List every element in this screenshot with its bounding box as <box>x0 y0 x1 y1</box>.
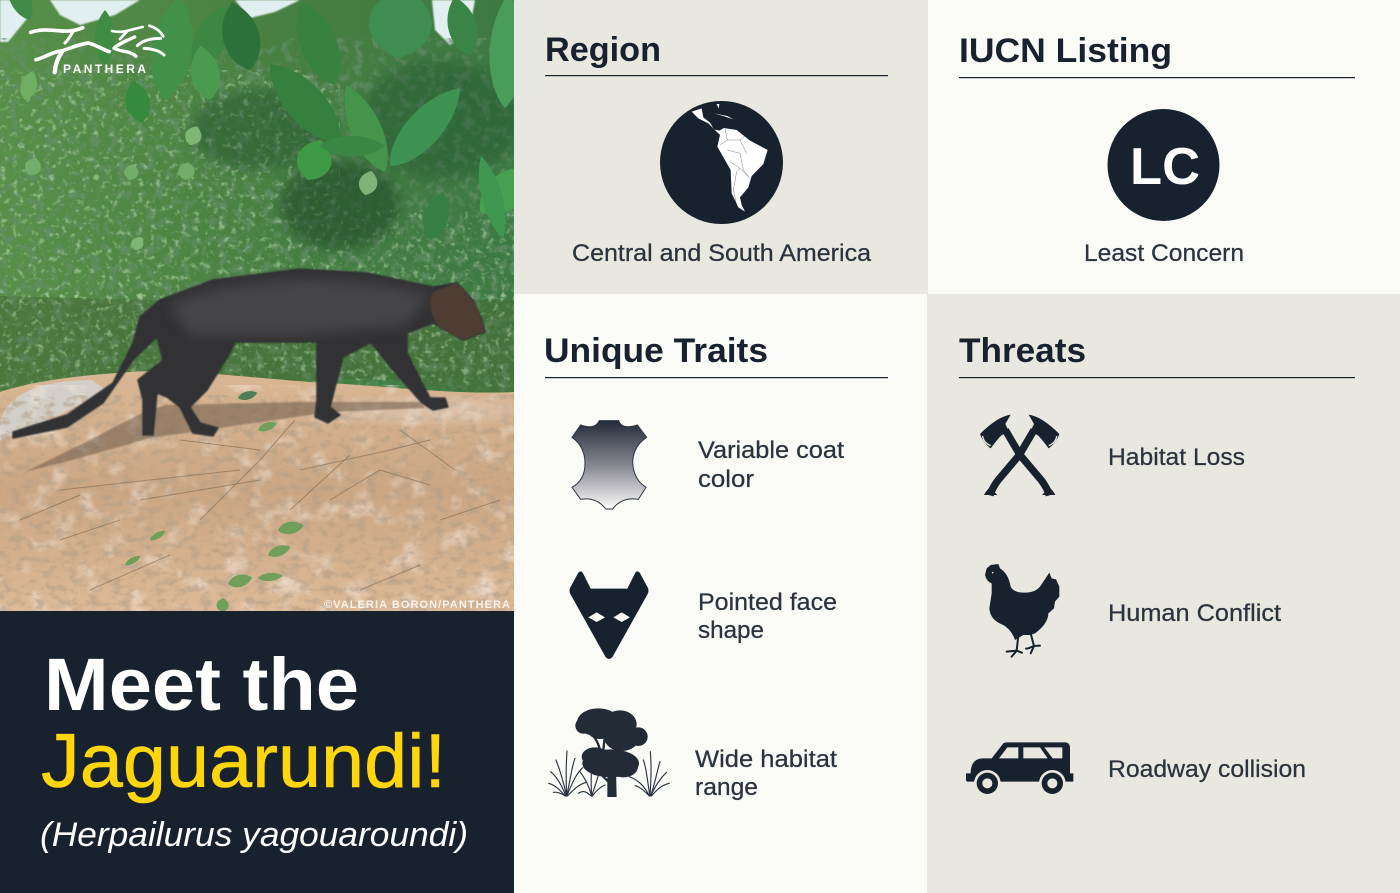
panel: threats <box>927 294 1400 893</box>
cat shadow <box>25 402 425 472</box>
text: variable coat color: Variable coat <box>698 437 844 464</box>
text: wide habitat range: Wide habitat <box>695 746 837 773</box>
text: pointed face shape <box>698 589 837 644</box>
label: Central and South America: Central and South America <box>572 240 872 267</box>
sky patches <box>0 0 475 45</box>
label: Least Concern: Least Concern <box>1084 240 1244 267</box>
photo credit: ©VALERIA BORON/PANTHERA <box>324 599 510 611</box>
jaguarundi silhouette <box>13 269 485 438</box>
panel: IUCN listing <box>928 0 1400 294</box>
icon: leather hide <box>572 421 647 509</box>
icon: Least Concern badge: LC <box>1130 138 1200 196</box>
logo: Panthera <box>31 26 164 76</box>
heading: Threats: Threats <box>959 332 1086 370</box>
text: habitat loss: Habitat Loss <box>1108 444 1245 471</box>
large foliage leaves <box>0 0 546 252</box>
text: pointed face shape: shape <box>698 617 764 644</box>
icon: chicken <box>985 564 1059 657</box>
heading: Unique Traits: Unique Traits <box>544 332 768 370</box>
logo wordmark: PANTHERA <box>63 62 146 76</box>
text: wide habitat range <box>695 746 837 801</box>
icon: crossed axes <box>980 415 1059 495</box>
text: roadway collision: Roadway collision <box>1108 756 1306 783</box>
text: variable coat color <box>698 437 844 493</box>
grass band above the ground <box>0 296 514 400</box>
text: variable coat color: color <box>698 466 754 493</box>
heading: Jaguarundi: Jaguarundi! <box>41 719 446 804</box>
sandy ground <box>0 371 514 612</box>
text: pointed face shape: Pointed face <box>698 589 837 616</box>
panel: title <box>0 611 514 893</box>
text: human conflict: Human Conflict <box>1108 600 1281 627</box>
scientific name: (Herpailurus yagouaroundi) <box>40 816 468 854</box>
panel: unique traits <box>514 294 927 893</box>
panel: photo of jaguarundi <box>0 0 546 613</box>
dry twigs <box>20 420 500 590</box>
text: wide habitat range: range <box>695 774 758 801</box>
heading: IUCN Listing: IUCN Listing <box>959 32 1172 70</box>
icon: trees and grass <box>549 708 669 797</box>
icon: car <box>966 742 1073 797</box>
panel: region <box>514 0 928 294</box>
heading: Region: Region <box>545 31 661 69</box>
icon: Least Concern badge <box>1108 109 1220 221</box>
icon: globe of the Americas <box>660 101 783 224</box>
icon: pointed face <box>569 571 648 659</box>
dark shade behind leaves <box>280 160 400 250</box>
heading: Meet the: Meet the <box>44 643 359 726</box>
small plants on ground <box>123 389 305 613</box>
